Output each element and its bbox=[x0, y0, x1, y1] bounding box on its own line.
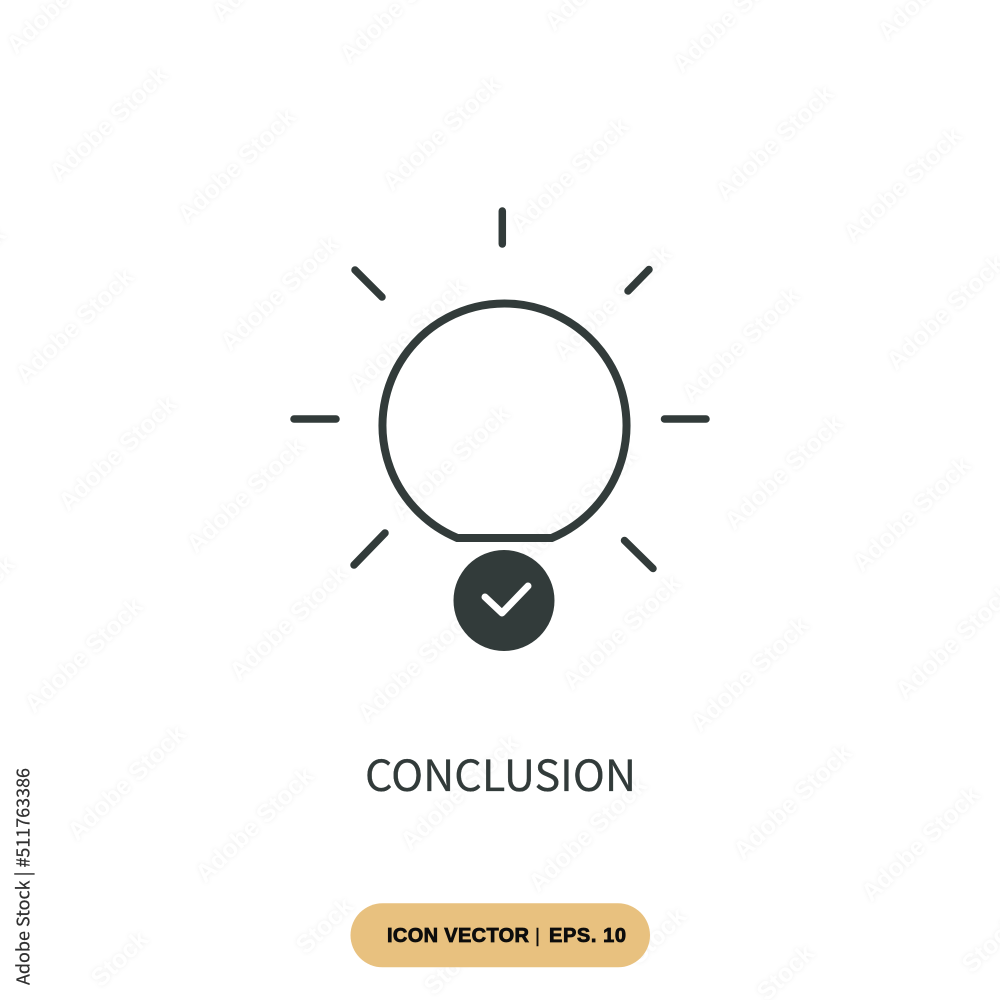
icon: rays bbox=[294, 211, 706, 568]
watermark: repeated Adobe Stock: Adobe Stock bbox=[523, 771, 652, 897]
watermark: repeated Adobe Stock: Adobe Stock bbox=[181, 432, 310, 558]
watermark: repeated Adobe Stock: Adobe Stock bbox=[386, 400, 515, 526]
badge: icon vector bbox=[350, 903, 650, 967]
badge: icon vector: EPS. 10 bbox=[549, 925, 626, 947]
badge: icon vector: ICON VECTOR bbox=[387, 925, 530, 947]
watermark: repeated Adobe Stock: Adobe Stock bbox=[719, 409, 848, 535]
watermark: repeated Adobe Stock: Adobe Stock bbox=[685, 611, 814, 737]
watermark: repeated Adobe Stock: Adobe Stock bbox=[710, 80, 839, 206]
watermark: repeated Adobe Stock: Adobe Stock bbox=[215, 230, 344, 356]
watermark: repeated Adobe Stock: Adobe Stock bbox=[548, 240, 677, 366]
title: CONCLUSION bbox=[365, 742, 636, 804]
icon: bulb outline bbox=[382, 304, 626, 538]
watermark: repeated Adobe Stock: Stock bbox=[418, 933, 487, 1000]
watermark: repeated Adobe Stock: Adobe Stock bbox=[395, 729, 524, 855]
watermark: repeated Adobe Stock: Adobe Stock bbox=[172, 103, 301, 229]
watermark: repeated Adobe Stock: Adobe Stock bbox=[352, 602, 481, 728]
watermark: repeated Adobe Stock: Adobe Stock bbox=[377, 70, 506, 196]
watermark: repeated Adobe Stock: Adobe Stock bbox=[343, 272, 472, 398]
watermark: repeated Adobe Stock: Adobe Stock bbox=[514, 442, 643, 568]
watermark: repeated Adobe Stock: Adobe Stock bbox=[53, 390, 182, 516]
icon: light bulb with check badge bbox=[294, 211, 706, 651]
badge: icon vector: | bbox=[535, 926, 540, 947]
watermark: repeated Adobe Stock: Adobe Stock bbox=[10, 263, 139, 389]
watermark: repeated Adobe Stock: Adobe Stock bbox=[676, 282, 805, 408]
watermark: repeated Adobe Stock: Stock bbox=[290, 892, 359, 959]
watermark: repeated Adobe Stock: Adobe Stock bbox=[728, 739, 857, 865]
watermark: repeated Adobe Stock: Adobe Stock bbox=[19, 592, 148, 718]
watermark: repeated Adobe Stock: Adobe Stock bbox=[505, 112, 634, 238]
icon: check badge bbox=[454, 550, 554, 651]
watermark: repeated Adobe Stock: Adobe Stock bbox=[557, 569, 686, 695]
watermark: repeated Adobe Stock: Adobe Stock bbox=[44, 61, 173, 187]
watermark: repeated Adobe Stock: Adobe Stock bbox=[856, 781, 985, 907]
watermark: repeated Adobe Stock: Stock bbox=[85, 925, 154, 992]
watermark: repeated Adobe Stock: Adobe Stock bbox=[224, 560, 353, 686]
watermark: repeated Adobe Stock: Stock bbox=[623, 902, 692, 969]
watermark: repeated Adobe Stock: Adobe Stock bbox=[838, 122, 967, 248]
watermark: repeated Adobe Stock: Adobe Stock bbox=[847, 451, 976, 577]
watermark: repeated Adobe Stock: Adobe Stock bbox=[62, 720, 191, 846]
watermark: repeated Adobe Stock: Adobe Stock bbox=[190, 762, 319, 888]
stock id: Adobe Stock | #511763386 bbox=[10, 768, 36, 985]
